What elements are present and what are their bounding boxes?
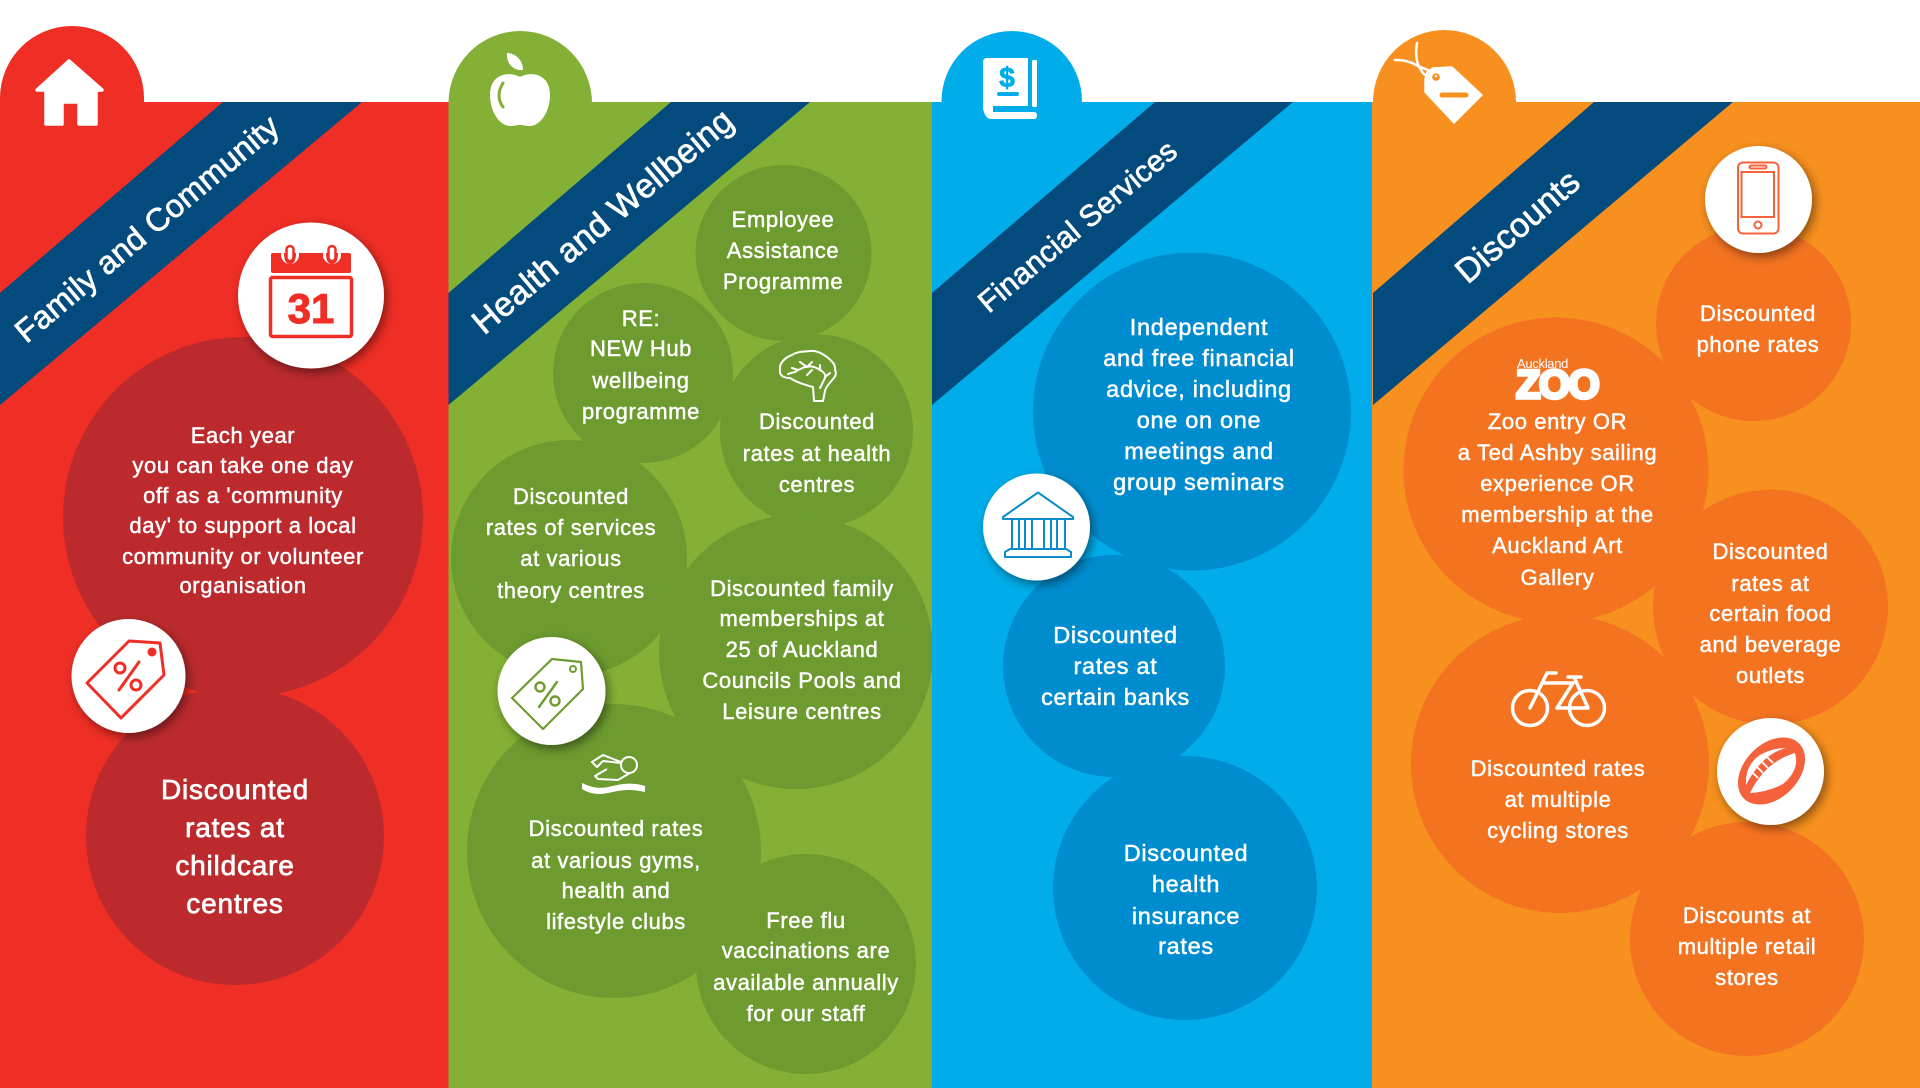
bubble: zoo: experience OR [1480, 471, 1635, 496]
icon: swimmer [582, 755, 645, 794]
bubble: childcare: Discounted [161, 774, 309, 805]
icon: price tag [1395, 43, 1482, 123]
bubble: health insurance: Discounted [1124, 840, 1248, 866]
bubble: community day: day' to support a local [129, 513, 357, 538]
bubble: childcare: childcare [175, 850, 295, 881]
bubble: zoo: Gallery [1521, 565, 1594, 590]
bubble: retail: multiple retail [1678, 934, 1816, 959]
bubble: health centres: Discounted [759, 409, 875, 434]
bubble: financial advice: Independent [1130, 314, 1268, 340]
icon: apple [490, 53, 550, 126]
bubble: NEW Hub: NEW Hub [590, 336, 692, 361]
ribbon: discounts [1373, 102, 1733, 405]
bubble: community day: you can take one day [132, 453, 354, 478]
bubble: cycling: at multiple [1505, 787, 1611, 812]
bubble: health insurance: health [1152, 871, 1220, 897]
bubble: food and beverage: Discounted [1712, 539, 1829, 564]
bubble: financial advice: and free financial [1103, 345, 1295, 371]
bubble: employee assistance [696, 165, 872, 341]
icon: percent tag [498, 637, 606, 745]
bubble: NEW Hub: RE: [622, 306, 660, 331]
icon: smartphone [1705, 146, 1812, 253]
bubble: banks: certain banks [1041, 684, 1190, 710]
bubble: retail: stores [1715, 965, 1779, 990]
bubble: phone rates [1656, 226, 1851, 421]
bubble: flu vaccinations: vaccinations are [722, 938, 890, 963]
icon: house [37, 61, 102, 124]
bubble: pools and leisure [659, 515, 933, 789]
bubble: NEW Hub [553, 283, 733, 463]
logo: Auckland Zoo: Auckland [1517, 356, 1568, 371]
icon: percent tag [72, 619, 186, 733]
icon: calendar [238, 222, 384, 368]
panel: discounts [1372, 30, 1920, 1088]
bubble: theory centres: rates of services [486, 515, 656, 540]
bubble: banks [1003, 555, 1225, 777]
icon: bicycle [1512, 673, 1604, 726]
bubble: employee assistance: Programme [723, 269, 843, 294]
bubble: theory centres: Discounted [513, 484, 629, 509]
bubble: pools and leisure: Councils Pools and [702, 668, 902, 693]
bubble: phone rates: Discounted [1700, 301, 1816, 326]
bubble: theory centres: theory centres [497, 578, 645, 603]
bubble: food and beverage: rates at [1731, 571, 1810, 596]
bubble: health centres [720, 334, 913, 528]
bubble: food and beverage: and beverage [1700, 632, 1841, 657]
bubble: gyms: at various gyms, [531, 848, 701, 873]
bubble: cycling: cycling stores [1487, 818, 1629, 843]
red panel background with tab [0, 26, 449, 1088]
ribbon: financial services [932, 102, 1293, 405]
bubble: banks: Discounted [1053, 622, 1178, 648]
bubble: community day: Each year [191, 423, 295, 448]
bubble: childcare: centres [186, 888, 284, 919]
bubble: community day: community or volunteer [122, 544, 364, 569]
orange panel background with tab [1372, 30, 1920, 1088]
bubble: financial advice: meetings and [1124, 438, 1274, 464]
bubble: childcare: rates at [185, 812, 285, 843]
bubble: employee assistance: Employee [732, 207, 834, 232]
panel: financial services [932, 31, 1372, 1088]
bubble: food and beverage: outlets [1736, 663, 1805, 688]
bubble: childcare [86, 687, 384, 985]
bubble: pools and leisure: Discounted family [710, 576, 894, 601]
bubble: banks: rates at [1074, 653, 1157, 679]
bubble: financial advice: one on one [1137, 407, 1261, 433]
icon: money book [983, 58, 1037, 119]
bubble: health insurance [1053, 756, 1317, 1020]
ribbon: family and community: Family and Community [8, 108, 286, 349]
panel: health and wellbeing [448, 31, 933, 1088]
icon: calendar: 31 [288, 285, 334, 332]
icon: bank [983, 474, 1090, 580]
icon: money book: $ [999, 62, 1015, 93]
bubble: financial advice: advice, including [1106, 376, 1292, 402]
bubble: zoo: membership at the [1461, 502, 1654, 527]
bubble: flu vaccinations [696, 854, 916, 1074]
bubble: gyms: Discounted rates [529, 816, 703, 841]
ribbon: health and wellbeing [448, 101, 810, 405]
bubble: employee assistance: Assistance [727, 238, 839, 263]
bubble: pools and leisure: memberships at [720, 606, 884, 631]
bubble: zoo [1404, 318, 1708, 622]
bubble: gyms: lifestyle clubs [546, 909, 686, 934]
bubble: cycling [1411, 615, 1709, 913]
bubble: retail: Discounts at [1683, 903, 1811, 928]
bubble: theory centres [451, 440, 687, 676]
bubble: theory centres: at various [520, 546, 622, 571]
bubble: NEW Hub: wellbeing [591, 368, 690, 393]
bubble: gyms [467, 704, 761, 998]
ribbon: discounts: Discounts [1448, 163, 1588, 291]
bubble: community day: organisation [179, 573, 307, 598]
bubble: zoo: Auckland Art [1492, 533, 1623, 558]
bubble: food and beverage [1653, 490, 1888, 724]
bubble: community day: off as a 'community [143, 483, 343, 508]
bubble: NEW Hub: programme [582, 399, 700, 424]
blue panel background with tab [932, 31, 1372, 1088]
bubble: health insurance: rates [1158, 933, 1214, 959]
bubble: community day [63, 337, 423, 697]
bubble: health centres: rates at health [743, 441, 891, 466]
bubble: zoo: a Ted Ashby sailing [1458, 440, 1657, 465]
bubble: phone rates: phone rates [1697, 332, 1819, 357]
bubble: health insurance: insurance [1132, 903, 1240, 929]
logo: Auckland Zoo: ZOO [1516, 363, 1599, 407]
bubble: pools and leisure: 25 of Auckland [726, 637, 878, 662]
bubble: flu vaccinations: Free flu [766, 908, 846, 933]
ribbon: health and wellbeing: Health and Wellbeing [465, 101, 741, 342]
bubble: food and beverage: certain food [1709, 601, 1832, 626]
bubble: flu vaccinations: available annually [713, 970, 899, 995]
bubble: zoo: Zoo entry OR [1488, 409, 1627, 434]
icon: brain [780, 351, 836, 401]
bubble: gyms: health and [562, 878, 670, 903]
ribbon: family and community [0, 102, 362, 405]
panel: family and community [0, 26, 449, 1088]
bubble: flu vaccinations: for our staff [747, 1001, 866, 1026]
bubble: financial advice [1033, 252, 1351, 570]
bubble: pools and leisure: Leisure centres [722, 699, 882, 724]
bubble: health centres: centres [779, 472, 855, 497]
green panel background with tab [448, 31, 932, 1088]
bubble: financial advice: group seminars [1113, 469, 1285, 495]
ribbon: financial services: Financial Services [972, 134, 1184, 319]
bubble: retail [1630, 822, 1864, 1056]
icon: rugby ball [1717, 718, 1824, 825]
bubble: cycling: Discounted rates [1471, 756, 1645, 781]
